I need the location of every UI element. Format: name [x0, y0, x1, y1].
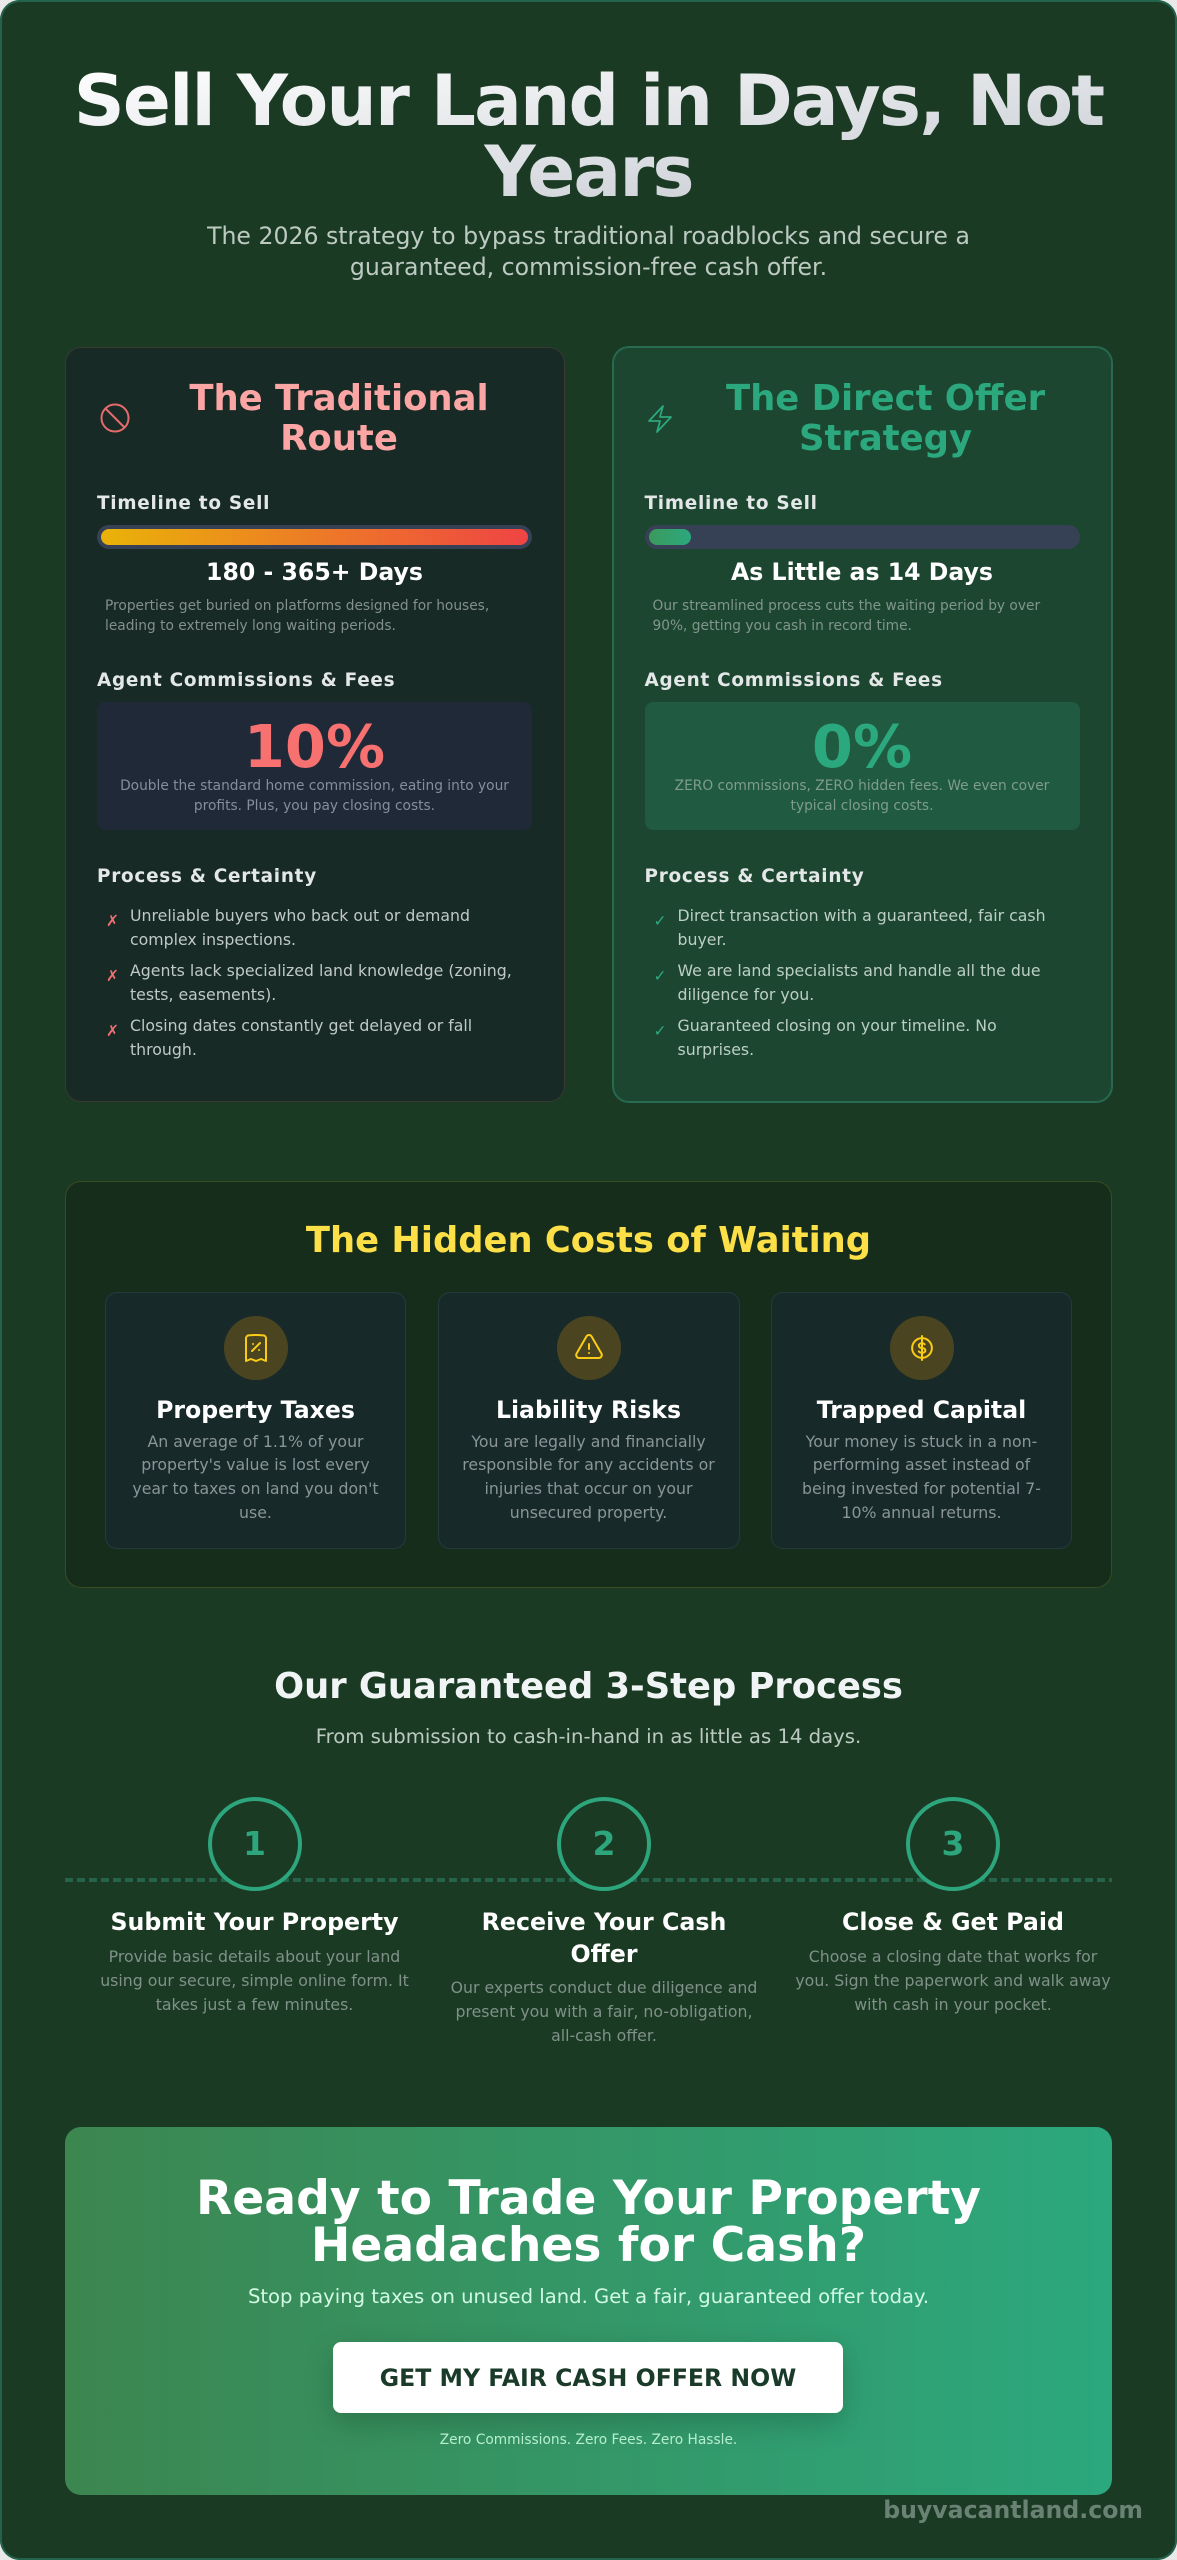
commission description	[120, 778, 509, 814]
step text: Choose a closing date that works for	[809, 1947, 1097, 1966]
panel: direct offer strategy	[612, 347, 1112, 1102]
heading: call to action	[196, 2171, 981, 2273]
heading: call to action: Ready to Trade Your Property	[196, 2171, 981, 2226]
commission description: typical closing costs.	[791, 798, 933, 814]
step title: Offer	[570, 1940, 638, 1968]
card text: An average of 1.1% of your	[147, 1432, 364, 1451]
card text	[132, 1432, 379, 1522]
step title: Close & Get Paid	[842, 1908, 1064, 1936]
timeline description: Our streamlined process cuts the waiting period by over	[652, 598, 1040, 614]
watermark: buyvacantland.com	[883, 2496, 1143, 2524]
heading: the direct offer strategy: Strategy	[799, 418, 972, 459]
icon: tax receipt	[224, 1316, 288, 1380]
title	[65, 65, 1112, 208]
card: property taxes	[105, 1292, 406, 1549]
timeline description	[652, 598, 1040, 634]
step number 3	[906, 1797, 1000, 1891]
card text: injuries that occur on your	[485, 1479, 692, 1498]
list item: direct transaction: ✓	[654, 912, 666, 930]
card text	[802, 1432, 1041, 1522]
step text: Provide basic details about your land	[109, 1947, 400, 1966]
list item: guaranteed closing: surprises.	[678, 1040, 754, 1059]
title: Sell Your Land in Days, Not	[74, 59, 1103, 142]
heading: the direct offer strategy: The Direct Offer	[726, 378, 1045, 419]
icon: warning triangle	[556, 1316, 620, 1380]
label: process: Process & Certainty	[644, 866, 864, 887]
step 2	[451, 1797, 757, 2045]
section: 3-step process	[65, 1666, 1112, 2045]
card text: unsecured property.	[510, 1503, 667, 1522]
timeline value: As Little as 14 Days	[731, 558, 993, 586]
step text	[100, 1947, 409, 2014]
panel: call to action	[65, 2127, 1112, 2495]
commission figure: 0%	[812, 712, 912, 781]
timeline bar	[97, 525, 532, 548]
step text: you. Sign the paperwork and walk away	[795, 1971, 1111, 1990]
subheading: call to action: Stop paying taxes on unused land. Get a fair, guaranteed offer today.	[248, 2285, 929, 2308]
list item: land specialists: We are land specialists and handle all the due	[678, 961, 1041, 980]
list item: direct transaction: buyer.	[678, 930, 727, 949]
list item: land specialists: ✓	[654, 967, 666, 985]
panel: hidden costs of waiting	[65, 1181, 1112, 1588]
step text: using our secure, simple online form. It	[100, 1971, 409, 1990]
list item: direct transaction: Direct transaction with a guaranteed, fair cash	[678, 906, 1046, 925]
timeline description: leading to extremely long waiting periods.	[105, 618, 396, 634]
step number 1: 1	[243, 1824, 266, 1863]
timeline value: 180 - 365+ Days	[206, 558, 423, 586]
list item: guaranteed closing	[654, 1016, 997, 1059]
card: trapped capital	[771, 1292, 1072, 1549]
step text: takes just a few minutes.	[156, 1995, 353, 2014]
subheading: process: From submission to cash-in-hand in as little as 14 days.	[316, 1725, 861, 1748]
icon: dollar coin	[890, 1316, 954, 1380]
timeline description: 90%, getting you cash in record time.	[652, 618, 912, 634]
list item: agents lack knowledge: tests, easements).	[130, 985, 276, 1004]
list item: delayed closing: Closing dates constantly get delayed or fall	[130, 1016, 472, 1035]
list item: delayed closing	[106, 1016, 472, 1059]
button label: GET MY FAIR CASH OFFER NOW	[380, 2364, 796, 2392]
list item: unreliable buyers: Unreliable buyers who back out or demand	[130, 906, 470, 925]
step text: with cash in your pocket.	[854, 1995, 1052, 2014]
timeline bar	[644, 525, 1080, 548]
list item: guaranteed closing: Guaranteed closing on your timeline. No	[678, 1016, 997, 1035]
icon: no symbol	[100, 404, 130, 432]
heading: call to action: Headaches for Cash?	[311, 2218, 866, 2273]
card text: year to taxes on land you don't	[132, 1479, 379, 1498]
card text: You are legally and financially	[471, 1432, 706, 1451]
commission description: Double the standard home commission, eating into your	[120, 778, 509, 794]
list item: direct transaction	[654, 906, 1046, 949]
card text: performing asset instead of	[813, 1455, 1030, 1474]
step number 1	[208, 1797, 302, 1891]
step text	[795, 1947, 1111, 2014]
heading: hidden costs: The Hidden Costs of Waiting	[306, 1220, 871, 1260]
card text: responsible for any accidents or	[462, 1455, 715, 1474]
list item: agents lack knowledge	[106, 961, 512, 1004]
step text: all-cash offer.	[551, 2026, 657, 2045]
list item: delayed closing: ✗	[106, 1022, 119, 1040]
card text: property's value is lost every	[141, 1455, 370, 1474]
list item: guaranteed closing: ✓	[654, 1022, 666, 1040]
card text: use.	[239, 1503, 272, 1522]
label: commissions: Agent Commissions & Fees	[97, 670, 395, 691]
step text: Our experts conduct due diligence and	[451, 1978, 757, 1997]
commission callout	[97, 702, 532, 830]
button: cash offer	[333, 2342, 843, 2413]
list item: unreliable buyers: complex inspections.	[130, 930, 296, 949]
label: commissions: Agent Commissions & Fees	[644, 670, 943, 691]
title: Years	[484, 130, 693, 213]
panel: traditional route	[65, 347, 564, 1102]
timeline description	[105, 598, 489, 634]
card text: Your money is stuck in a non-	[806, 1432, 1037, 1451]
label: timeline: Timeline to Sell	[644, 493, 818, 514]
step title: Submit Your Property	[110, 1908, 399, 1936]
heading: the traditional route: Route	[280, 418, 398, 459]
list item: land specialists: diligence for you.	[678, 985, 814, 1004]
label: process: Process & Certainty	[97, 866, 317, 887]
card text: 10% annual returns.	[841, 1503, 1002, 1522]
step number 3: 3	[942, 1824, 964, 1863]
list item: agents lack knowledge: Agents lack specialized land knowledge (zoning,	[130, 961, 512, 980]
commission description	[675, 778, 1050, 814]
commission callout	[644, 702, 1080, 830]
card title: Property Taxes	[156, 1396, 355, 1424]
reassurance note: Zero Commissions. Zero Fees. Zero Hassle.	[440, 2432, 737, 2448]
subtitle: guaranteed, commission-free cash offer.	[350, 253, 827, 281]
heading: the traditional route	[189, 378, 489, 459]
card title: Liability Risks	[496, 1396, 681, 1424]
list item: delayed closing: through.	[130, 1040, 197, 1059]
commission figure: 10%	[244, 712, 385, 781]
list item: unreliable buyers: ✗	[106, 912, 119, 930]
step 3	[795, 1797, 1111, 2014]
step title	[482, 1908, 726, 1968]
timeline description: Properties get buried on platforms designed for houses,	[105, 598, 489, 614]
list item: land specialists	[654, 961, 1041, 1004]
commission description: ZERO commissions, ZERO hidden fees. We even cover	[675, 778, 1049, 794]
step title: Receive Your Cash	[482, 1908, 726, 1936]
commission description: profits. Plus, you pay closing costs.	[194, 798, 435, 814]
card title: Trapped Capital	[817, 1396, 1026, 1424]
list item: agents lack knowledge: ✗	[106, 967, 119, 985]
subtitle	[207, 222, 970, 281]
icon: lightning bolt	[648, 405, 672, 433]
step text: present you with a fair, no-obligation,	[455, 2002, 753, 2021]
step text	[451, 1978, 757, 2045]
card text: being invested for potential 7-	[802, 1479, 1041, 1498]
step number 2: 2	[593, 1824, 615, 1863]
list item: unreliable buyers	[106, 906, 470, 949]
label: timeline: Timeline to Sell	[97, 493, 270, 514]
subtitle: The 2026 strategy to bypass traditional roadblocks and secure a	[207, 222, 970, 250]
step 1	[100, 1797, 409, 2014]
heading: the direct offer strategy	[726, 378, 1045, 459]
card: liability risks	[438, 1292, 740, 1549]
step number 2	[557, 1797, 651, 1891]
card text	[462, 1432, 715, 1522]
heading: process: Our Guaranteed 3-Step Process	[274, 1666, 903, 1707]
heading: the traditional route: The Traditional	[189, 378, 489, 419]
